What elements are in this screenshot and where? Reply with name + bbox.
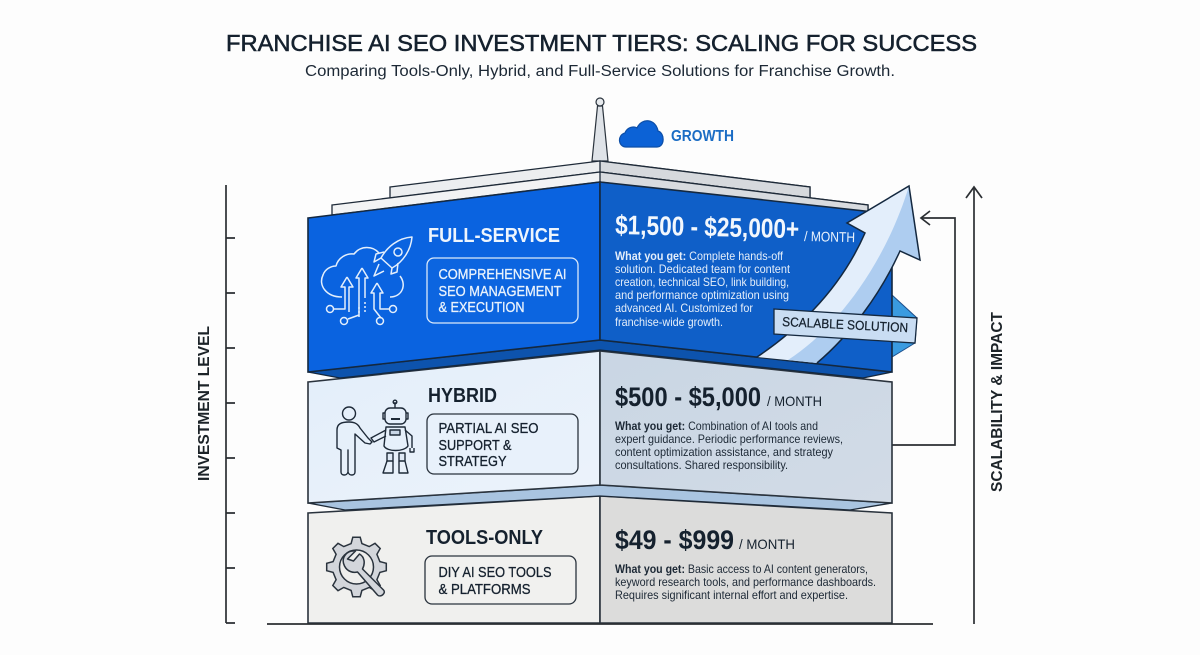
hybrid details: expert guidance. Periodic performance reviews, bbox=[615, 432, 843, 446]
hybrid description: SUPPORT & bbox=[438, 438, 512, 454]
tools-only price: $49 - $999 bbox=[615, 525, 734, 555]
tools-only details: What you get: Basic access to AI content generators, bbox=[615, 562, 868, 576]
full-service description: & EXECUTION bbox=[438, 300, 524, 316]
full-service description bbox=[438, 267, 566, 316]
full-service underside bbox=[308, 340, 892, 378]
tools-only details: Requires significant internal effort and expertise. bbox=[615, 588, 848, 602]
tier: tools-only bbox=[308, 496, 892, 623]
tools-only description: DIY AI SEO TOOLS bbox=[438, 565, 552, 581]
tier: full-service bbox=[308, 182, 892, 378]
full-service details: solution. Dedicated team for content bbox=[615, 262, 791, 276]
full-service heading: FULL-SERVICE bbox=[428, 225, 560, 247]
full-service details: creation, technical SEO, link building, bbox=[615, 275, 789, 289]
tools-only left face bbox=[308, 496, 600, 623]
hybrid heading: HYBRID bbox=[428, 385, 497, 407]
tools-only details bbox=[615, 562, 876, 602]
full-service left face bbox=[308, 182, 600, 372]
investment level label: INVESTMENT LEVEL bbox=[196, 326, 213, 481]
icon: cloud rocket and circuit arrows bbox=[322, 237, 412, 324]
icon: gear and wrench bbox=[327, 537, 386, 597]
hybrid details: What you get: Combination of AI tools and bbox=[615, 419, 818, 433]
hybrid description bbox=[438, 421, 538, 470]
full-service details: advanced AI. Customized for bbox=[615, 301, 753, 315]
connector arrow bbox=[892, 211, 955, 445]
full-service price: $1,500 - $25,000+ bbox=[615, 210, 799, 244]
full-service details: What you get: Complete hands-off bbox=[615, 249, 784, 263]
baseline bbox=[267, 623, 933, 625]
hybrid per month: / MONTH bbox=[767, 393, 822, 409]
scalable solution banner: SCALABLE SOLUTION bbox=[782, 314, 908, 335]
full-service details: and performance optimization using bbox=[615, 288, 789, 302]
hybrid description box bbox=[427, 414, 578, 474]
tier: hybrid bbox=[308, 351, 892, 510]
scalability axis arrow bbox=[966, 187, 982, 624]
growth cloud icon bbox=[619, 121, 663, 147]
growth label: GROWTH bbox=[671, 128, 734, 145]
tools-only heading: TOOLS-ONLY bbox=[426, 527, 544, 549]
tools-only description bbox=[438, 565, 552, 598]
title: FRANCHISE AI SEO INVESTMENT TIERS: SCALING FOR SUCCESS bbox=[226, 30, 977, 56]
hybrid description: PARTIAL AI SEO bbox=[438, 421, 538, 437]
hybrid description: STRATEGY bbox=[438, 454, 507, 470]
hybrid right face bbox=[600, 351, 892, 503]
hybrid details: content optimization assistance, and strategy bbox=[615, 445, 833, 459]
hybrid price: $500 - $5,000 bbox=[615, 382, 761, 412]
hybrid underside bbox=[308, 485, 892, 510]
full-service per month: / MONTH bbox=[804, 228, 855, 245]
growth arrow bbox=[757, 186, 920, 363]
side wing behind label bbox=[892, 295, 917, 357]
full-service details bbox=[615, 249, 791, 329]
tools-only per month: / MONTH bbox=[739, 536, 795, 552]
full-service right face bbox=[600, 182, 892, 372]
full-service details: franchise-wide growth. bbox=[615, 315, 723, 329]
icon: person and robot handshake bbox=[337, 400, 414, 475]
scalability label: SCALABILITY & IMPACT bbox=[989, 312, 1006, 492]
antenna bbox=[592, 98, 608, 161]
investment level axis bbox=[226, 185, 235, 623]
full-service description: SEO MANAGEMENT bbox=[438, 284, 562, 300]
tools-only description box bbox=[425, 556, 576, 604]
rooftop bbox=[332, 161, 868, 215]
tools-only right face bbox=[600, 496, 892, 623]
hybrid left face bbox=[308, 351, 600, 503]
full-service description box bbox=[427, 258, 578, 323]
scalable solution banner bbox=[774, 309, 917, 343]
hybrid details bbox=[615, 419, 843, 472]
full-service description: COMPREHENSIVE AI bbox=[438, 267, 566, 283]
tools-only description: & PLATFORMS bbox=[438, 582, 530, 598]
tools-only details: keyword research tools, and performance dashboards. bbox=[615, 575, 876, 589]
subtitle: Comparing Tools-Only, Hybrid, and Full-Service Solutions for Franchise Growth. bbox=[305, 63, 895, 80]
hybrid details: consultations. Shared responsibility. bbox=[615, 458, 788, 472]
